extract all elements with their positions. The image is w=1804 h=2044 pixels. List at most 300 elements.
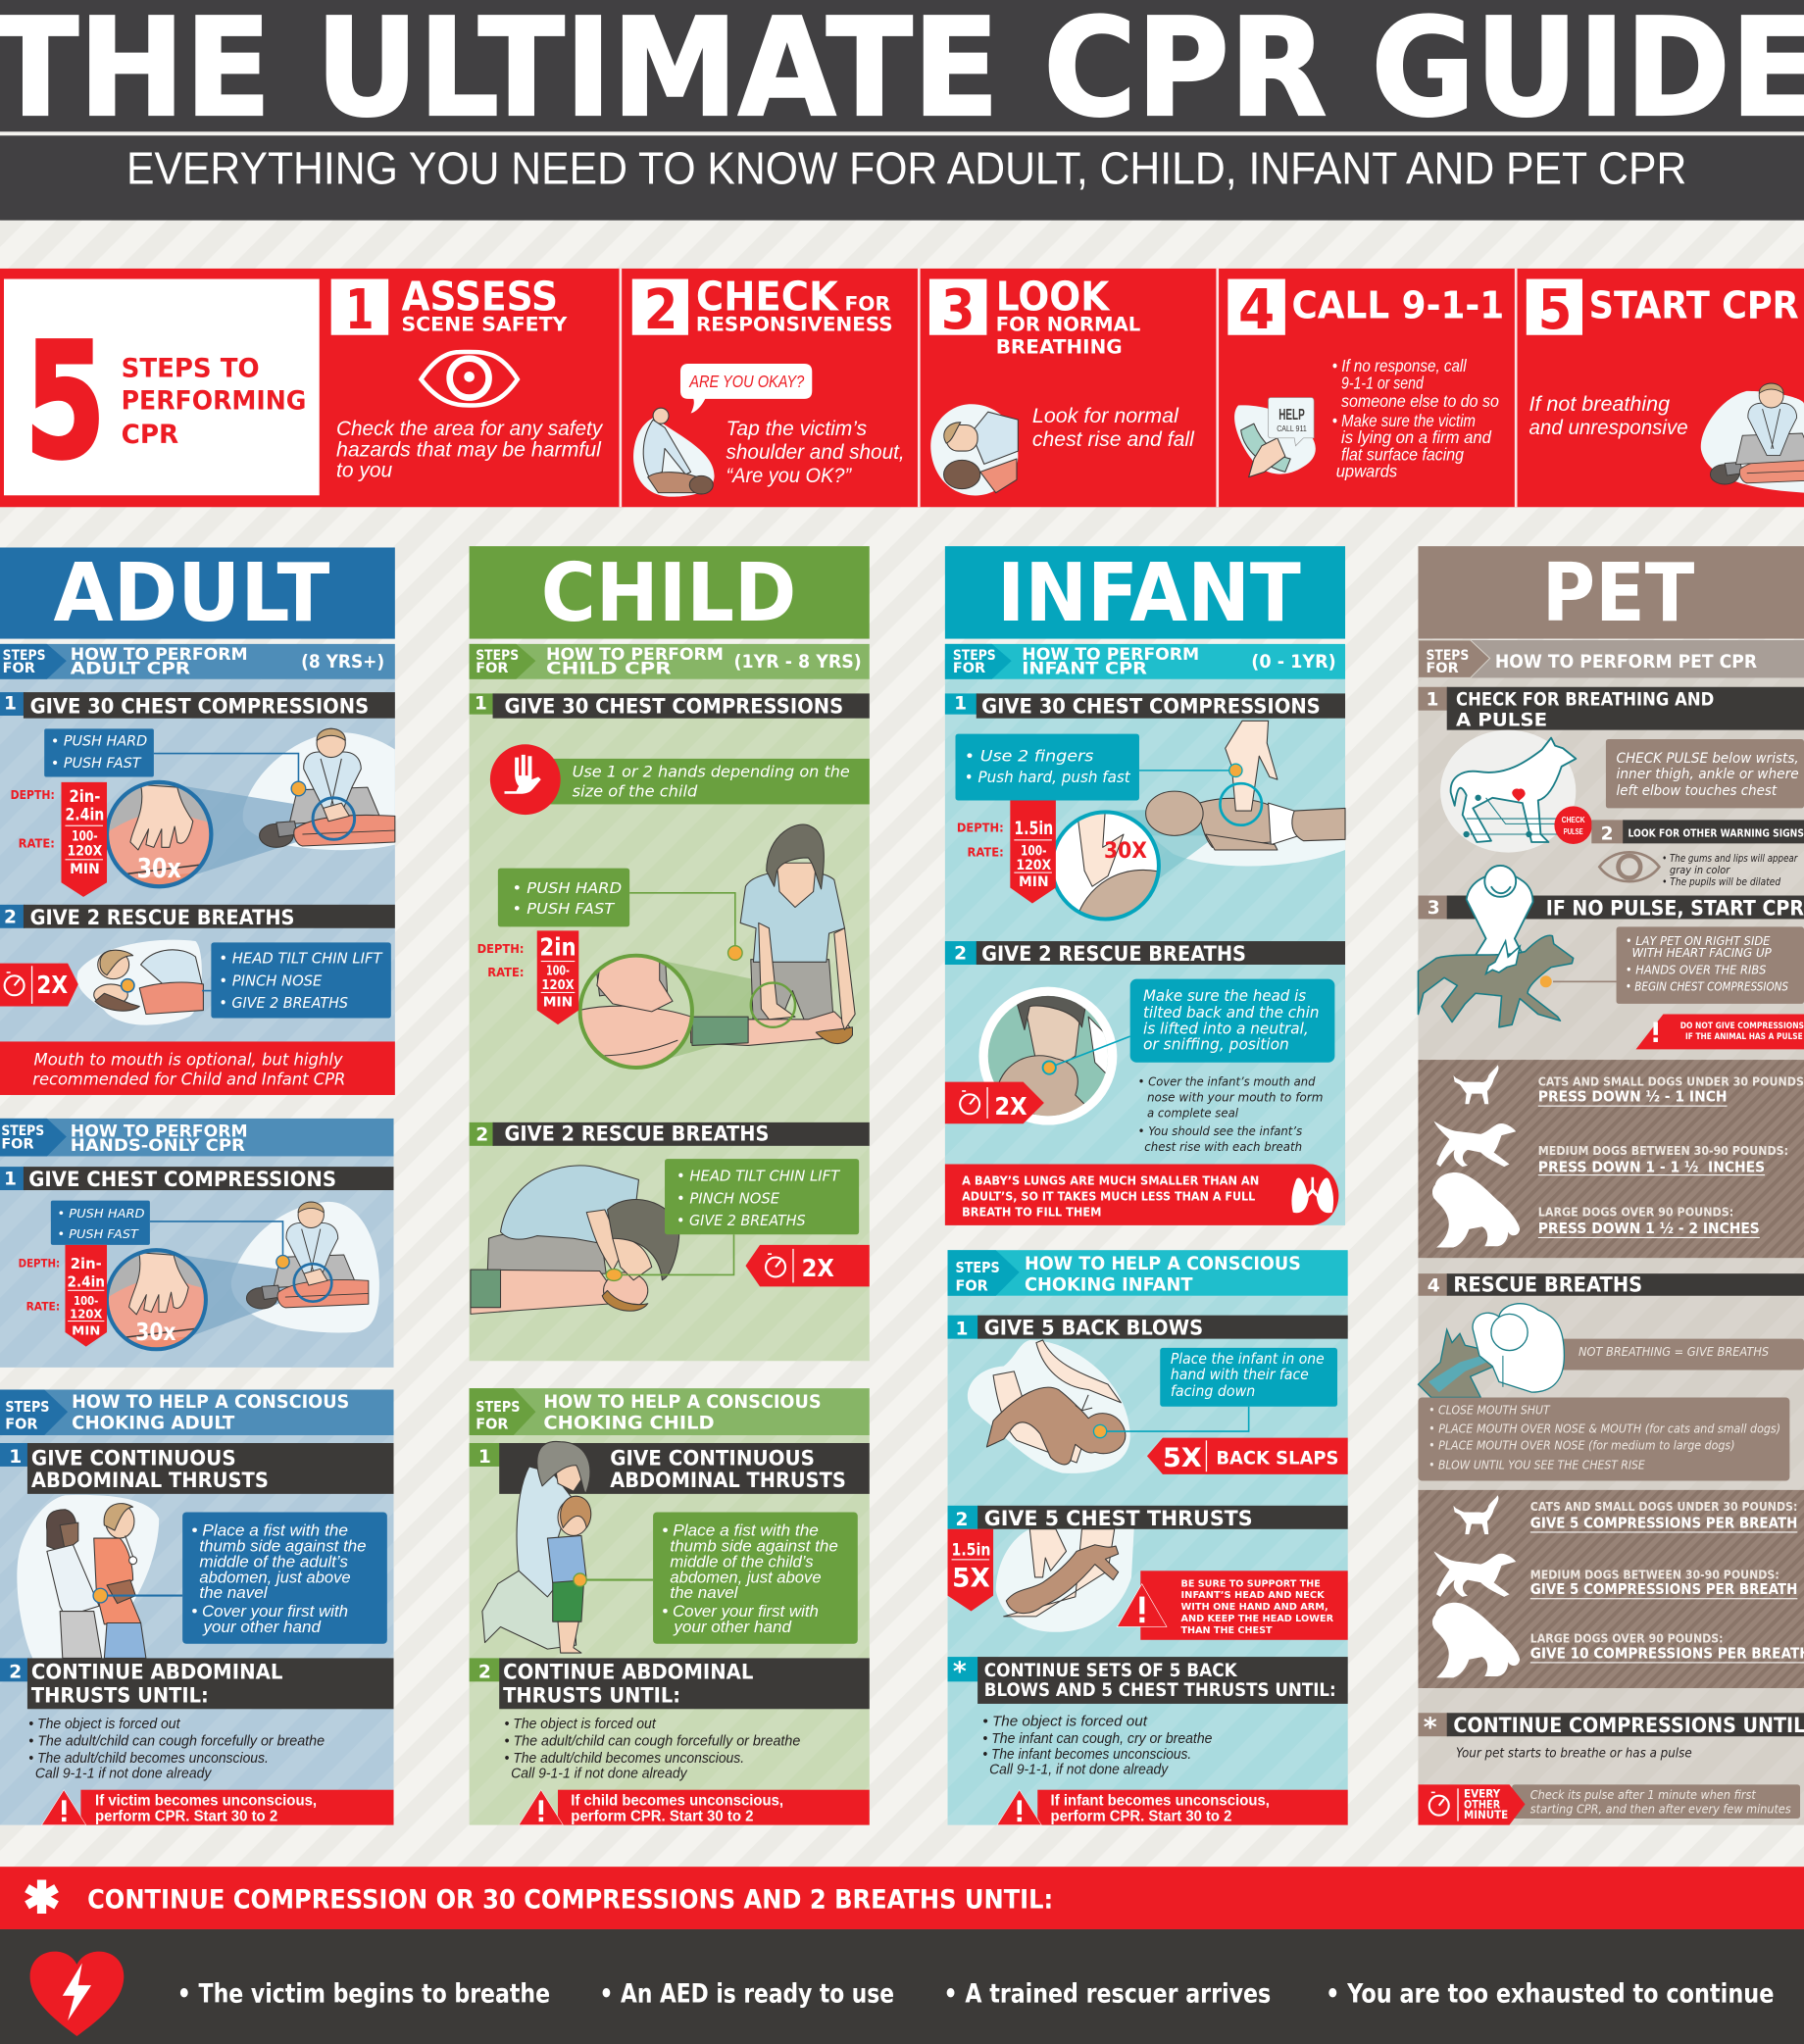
panel: choking child: HOW TO HELP A CONSCIOUS	[543, 1392, 822, 1413]
depth and rate tag	[11, 782, 107, 897]
step 4: call 9-1-1: 9-1-1 or send	[1341, 373, 1425, 392]
callout: place a fist: your other hand	[202, 1618, 322, 1636]
callout: use 1 or 2 hands: size of the child	[573, 781, 698, 800]
depth and rate tag: MIN	[1019, 874, 1049, 890]
bar: not breathing: NOT BREATHING = GIVE BREATHS	[1578, 1344, 1769, 1359]
list: until conditions: • The object is forced out	[28, 1717, 180, 1732]
list: infant breath notes: a complete seal	[1147, 1106, 1238, 1121]
step heading: if no pulse start CPR	[1418, 896, 1804, 921]
depth and rate tag: 120X	[70, 1306, 103, 1321]
step heading: continue thrusts	[0, 1658, 394, 1709]
warning bar	[42, 1790, 394, 1825]
step heading: give 2 rescue breaths: 2	[4, 907, 17, 927]
warning: support head: AND KEEP THE HEAD LOWER	[1181, 1614, 1333, 1624]
list: infant breath notes	[1138, 1074, 1323, 1154]
panel: hands-only CPR	[0, 1119, 394, 1368]
callout: place a fist: thumb side against the	[199, 1536, 367, 1555]
list: until conditions	[505, 1717, 800, 1782]
callout: head tilt chin lift	[606, 1159, 859, 1280]
warning bar: perform CPR. Start 30 to 2	[1051, 1809, 1231, 1825]
heading: infant: INFANT	[997, 546, 1301, 640]
depth and rate tag: MIN	[543, 996, 573, 1011]
column: pet	[1418, 546, 1804, 1825]
tag: 5x back slaps	[1147, 1438, 1348, 1474]
callout: head tilt chin lift: • HEAD TILT CHIN LIFT	[676, 1169, 840, 1185]
callout: place a fist: the navel	[670, 1583, 739, 1602]
step 5: start CPR: and unresponsive	[1528, 416, 1688, 439]
callout: check pulse: left elbow touches chest	[1617, 783, 1778, 799]
illustration: child rescue breaths	[471, 1166, 679, 1314]
list: rescue breath instructions	[1418, 1397, 1789, 1481]
step heading: abdominal thrusts: GIVE CONTINUOUS	[31, 1447, 236, 1471]
callout: lay pet on right side: • LAY PET ON RIGHT SIDE	[1626, 934, 1771, 948]
icon: eye	[1599, 852, 1659, 881]
step 5: start CPR: 5	[1538, 278, 1572, 342]
callout: place a fist: middle of the child’s	[670, 1552, 814, 1570]
callout: use 2 fingers: • Use 2 fingers	[965, 747, 1093, 766]
callout: place a fist	[182, 1512, 387, 1644]
band: how to perform infant CPR: (0 - 1YR)	[1251, 652, 1336, 673]
step heading: if no pulse start CPR: 3	[1428, 898, 1440, 919]
panel: choking adult: CHOKING ADULT	[72, 1413, 235, 1433]
callout: use 1 or 2 hands	[490, 744, 870, 815]
callout: head tilt chin lift: • GIVE 2 BREATHS	[676, 1213, 806, 1229]
panel: choking infant	[948, 1250, 1348, 1825]
illustration: tapping shoulder	[633, 408, 715, 497]
badge: check pulse: CHECK	[1562, 816, 1585, 824]
panel: choking child: STEPS	[476, 1399, 520, 1416]
step 4: call 9-1-1: 4	[1238, 278, 1275, 342]
illustration: start compressions	[1701, 383, 1804, 493]
callout: place a fist: thumb side against the	[670, 1536, 838, 1555]
speech bubble	[680, 364, 812, 414]
banner: continue compression: CONTINUE COMPRESSION OR 30 COMPRESSIONS AND 2 BREATHS UNTIL:	[87, 1885, 1053, 1916]
badge: check pulse: PULSE	[1564, 827, 1583, 836]
step 5: start CPR: If not breathing	[1528, 392, 1670, 416]
column: infant	[945, 546, 1348, 1825]
depth and rate tag: DEPTH:	[477, 942, 524, 956]
step heading: continue compressions until: *	[1424, 1713, 1437, 1743]
panel: press depth by size: MEDIUM DOGS BETWEEN 30-90 POUNDS:	[1538, 1144, 1788, 1158]
callout: check pulse: inner thigh, ankle or where	[1617, 767, 1799, 782]
icon: hand	[490, 744, 561, 815]
list: infant breath notes: • You should see the infant’s	[1138, 1123, 1303, 1138]
band: how to perform child CPR: FOR	[476, 661, 509, 676]
list: until conditions: • The object is forced out	[505, 1717, 657, 1732]
callout: place a fist: • Place a fist with the	[662, 1521, 819, 1539]
step heading: check for breathing: A PULSE	[1456, 711, 1547, 731]
warning: support head	[1117, 1570, 1348, 1640]
panel: five steps band	[0, 269, 1804, 507]
panel: press depth by size: PRESS DOWN 1 ½ - 2 INCHES	[1538, 1220, 1760, 1237]
step heading: continue sets: CONTINUE SETS OF 5 BACK	[984, 1661, 1237, 1681]
illustration: dog pulse check	[1440, 730, 1576, 853]
step heading: give 30 chest compressions: GIVE 30 CHEST COMPRESSIONS	[505, 694, 843, 719]
depth and rate tag: 100-	[546, 965, 570, 979]
warning bar: If victim becomes unconscious,	[95, 1793, 317, 1810]
illustration: adult compressions: 30x	[137, 852, 181, 884]
step heading: continue sets: *	[953, 1657, 967, 1687]
bar: check pulse interval: Check its pulse after 1 minute when first	[1530, 1787, 1757, 1802]
band: how to perform infant CPR: STEPS	[953, 648, 996, 664]
callout: head tilted back	[1056, 979, 1334, 1065]
panel: choking child	[470, 1388, 870, 1825]
step heading: abdominal thrusts: GIVE CONTINUOUS	[610, 1447, 815, 1471]
callout: place the infant: hand with their face	[1171, 1367, 1309, 1383]
warning bar: If child becomes unconscious,	[571, 1793, 783, 1810]
panel: choking infant: CHOKING INFANT	[1025, 1274, 1193, 1295]
step heading: continue thrusts: CONTINUE ABDOMINAL	[503, 1661, 753, 1685]
panel: stop conditions: • A trained rescuer arrives	[944, 1978, 1271, 2009]
list: until conditions: • The adult/child can cough forcefully or breathe	[28, 1733, 325, 1749]
callout: lay pet on right side: • HANDS OVER THE RIBS	[1626, 963, 1767, 976]
subtitle: EVERYTHING YOU NEED TO KNOW FOR ADULT, CHILD, INFANT AND PET CPR	[126, 142, 1686, 193]
panel: press depth by size: LARGE DOGS OVER 90 POUNDS:	[1538, 1206, 1733, 1220]
callout: place a fist: abdomen, just above	[670, 1568, 822, 1586]
step heading: give 30 chest compressions: 1	[954, 693, 967, 714]
callout: place a fist	[653, 1512, 858, 1644]
illustration: adult choking	[17, 1495, 182, 1658]
step 4: call 9-1-1: someone else to do so	[1341, 391, 1499, 411]
warning: support head: WITH ONE HAND AND ARM,	[1181, 1602, 1328, 1613]
panel: choking adult: STEPS	[5, 1399, 50, 1416]
callout: use 2 fingers: • Push hard, push fast	[965, 768, 1130, 786]
callout: lay pet on right side	[1539, 926, 1804, 1004]
icon: asterisk	[27, 1879, 57, 1914]
band: how to perform adult CPR: (8 YRS+)	[301, 652, 384, 673]
banner: continue compression	[0, 1867, 1804, 1929]
panel: stop conditions: • The victim begins to breathe	[177, 1978, 550, 2009]
band: how to perform child CPR: CHILD CPR	[546, 659, 672, 678]
list: infant breath notes: chest rise with each breath	[1144, 1139, 1302, 1154]
icon: large dog	[1432, 1603, 1520, 1677]
list: until conditions: • The infant can cough, cry or breathe	[982, 1731, 1212, 1747]
step heading: chest thrusts	[948, 1506, 1348, 1531]
warning: do not give compressions	[1635, 1015, 1804, 1049]
callout: place a fist: • Cover your first with	[662, 1602, 819, 1620]
depth and rate tag: 2in-	[69, 787, 100, 806]
panel: hands-only CPR: STEPS	[1, 1123, 44, 1139]
step heading: warning signs	[1591, 820, 1804, 844]
step 4: call 9-1-1: • If no response, call	[1332, 356, 1468, 375]
heading: pet: PET	[1542, 546, 1694, 640]
tag: 2x: 2X	[36, 971, 68, 999]
callout: baby lungs: BREATH TO FILL THEM	[962, 1205, 1101, 1220]
warning bar: If infant becomes unconscious,	[1051, 1793, 1270, 1810]
depth and rate tag	[477, 930, 578, 1024]
heading: child: CHILD	[541, 546, 796, 640]
step 1: assess scene safety	[331, 273, 604, 482]
step heading: give 2 rescue breaths: 2	[954, 944, 967, 965]
depth and rate tag	[957, 800, 1056, 903]
step heading: give 2 rescue breaths: GIVE 2 RESCUE BREATHS	[505, 1122, 769, 1147]
panel: 5 steps to performing CPR: CPR	[122, 420, 178, 450]
callout: use 2 fingers	[956, 734, 1242, 800]
step 3: look for normal breathing: chest rise and fall	[1032, 427, 1195, 451]
icon: medium dog	[1433, 1122, 1516, 1167]
band: how to perform child CPR: HOW TO PERFORM	[546, 645, 724, 665]
bar: not breathing	[1562, 1339, 1804, 1371]
callout: push hard push fast: • PUSH FAST	[51, 756, 142, 772]
depth and rate tag: DEPTH:	[19, 1257, 60, 1270]
panel: choking child: CHOKING CHILD	[543, 1413, 715, 1433]
band: how to perform adult CPR: HOW TO PERFORM	[71, 645, 248, 665]
callout: head tilt chin lift	[211, 942, 391, 1019]
callout: push hard push fast	[44, 728, 306, 796]
list: warning signs	[1662, 852, 1798, 888]
callout: place a fist: middle of the adult’s	[199, 1552, 348, 1570]
panel: press depth by size: PRESS DOWN ½ - 1 INCH	[1538, 1088, 1728, 1106]
illustration: adult compressions	[104, 728, 395, 892]
callout: head tilted back: tilted back and the chin	[1143, 1003, 1319, 1022]
panel: hands-only CPR: FOR	[1, 1136, 34, 1152]
callout: place the infant	[1093, 1348, 1337, 1438]
band: how to perform infant CPR: INFANT CPR	[1022, 659, 1147, 678]
band: how to perform adult CPR: ADULT CPR	[71, 659, 190, 678]
panel: choking adult: FOR	[5, 1416, 38, 1432]
step heading: give 2 rescue breaths: GIVE 2 RESCUE BREATHS	[981, 942, 1246, 967]
callout: place a fist: the navel	[199, 1583, 269, 1602]
band: how to perform pet CPR	[1418, 640, 1804, 677]
text: pet starts to breathe: Your pet starts to breathe or has a pulse	[1456, 1746, 1692, 1761]
tag: 5x back slaps: BACK SLAPS	[1216, 1448, 1338, 1469]
icon: phone and help sign	[1234, 398, 1316, 477]
depth and rate tag: 100-	[1021, 843, 1047, 859]
step 1: assess scene safety: 1	[345, 278, 375, 342]
icon: large dog	[1432, 1172, 1520, 1248]
icon: phone and help sign: CALL 911	[1277, 424, 1307, 433]
step heading: back blows: 1	[956, 1320, 968, 1340]
band: how to perform child CPR	[470, 644, 870, 679]
illustration: chest thrusts	[996, 1529, 1134, 1632]
step 3: look for normal breathing: LOOK	[996, 273, 1111, 320]
list: until conditions: Call 9-1-1 if not done already	[511, 1767, 688, 1782]
step 4: call 9-1-1	[1228, 278, 1504, 481]
step 3: look for normal breathing	[929, 273, 1195, 496]
depth and rate tag: 1.5in	[1014, 819, 1053, 839]
callout: mouth to mouth note: recommended for Child and Infant CPR	[32, 1070, 345, 1088]
illustration: infant rescue breaths	[978, 983, 1117, 1125]
step 1: assess scene safety: Check the area for any safety	[336, 417, 604, 440]
depth and rate tag: RATE:	[487, 966, 524, 979]
tag: every other minute	[1418, 1784, 1525, 1825]
callout: lay pet on right side: WITH HEART FACING UP	[1632, 946, 1773, 960]
band: how to perform adult CPR	[0, 644, 395, 679]
warning: support head: BE SURE TO SUPPORT THE	[1181, 1578, 1321, 1589]
callout: push hard push fast	[498, 869, 742, 960]
tag: every other minute: EVERY	[1464, 1788, 1501, 1801]
panel: press depth by size: PRESS DOWN 1 - 1 ½ INCHES	[1538, 1158, 1765, 1175]
step heading: rescue breaths: RESCUE BREATHS	[1453, 1273, 1642, 1298]
list: until conditions: • The adult/child becomes unconscious.	[505, 1751, 744, 1767]
step heading: chest thrusts: GIVE 5 CHEST THRUSTS	[984, 1507, 1253, 1531]
step heading: give 30 chest compressions: GIVE 30 CHEST COMPRESSIONS	[981, 694, 1321, 719]
callout: head tilted back: or sniffing, position	[1143, 1034, 1289, 1053]
depth and rate tag: DEPTH:	[957, 821, 1004, 834]
list: infant breath notes: • Cover the infant’s mouth and	[1138, 1074, 1316, 1089]
list: until conditions: • The infant becomes unconscious.	[982, 1747, 1191, 1763]
callout: push hard push fast: • PUSH HARD	[57, 1206, 145, 1221]
panel: choking infant: STEPS	[956, 1260, 1000, 1276]
step heading: abdominal thrusts	[0, 1443, 394, 1494]
tag: every other minute: MINUTE	[1464, 1809, 1508, 1821]
panel: stop conditions: • An AED is ready to use	[600, 1978, 894, 2009]
tag: 5x back slaps: 5X	[1163, 1443, 1202, 1473]
step heading: continue thrusts	[470, 1658, 870, 1709]
step 3: look for normal breathing: Look for normal	[1032, 404, 1179, 427]
panel: choking adult: HOW TO HELP A CONSCIOUS	[72, 1392, 349, 1413]
list: rescue breath instructions: • CLOSE MOUTH SHUT	[1428, 1404, 1551, 1418]
step 2: check for responsiveness: CHECK	[696, 273, 840, 320]
step heading: abdominal thrusts	[470, 1443, 870, 1494]
panel: compressions per breath: MEDIUM DOGS BETWEEN 30-90 POUNDS:	[1530, 1568, 1779, 1581]
depth and rate tag: 2.4in	[65, 805, 104, 823]
callout: baby lungs: ADULT’S, SO IT TAKES MUCH LESS THAN A FULL	[962, 1189, 1255, 1204]
depth and rate tag: 120X	[1016, 858, 1051, 873]
depth and rate tag: 120X	[67, 843, 103, 859]
icon: cat	[1453, 1495, 1498, 1534]
panel: choking adult	[0, 1389, 394, 1825]
callout: push hard push fast: • PUSH FAST	[57, 1226, 139, 1241]
callout: push hard push fast: • PUSH FAST	[512, 901, 615, 918]
illustration: pet rescue breaths	[1418, 1304, 1564, 1397]
step heading: continue thrusts: THRUSTS UNTIL:	[31, 1684, 209, 1709]
step 1: assess scene safety: SCENE SAFETY	[401, 313, 568, 336]
tag: 1.5in 5x: 1.5in	[952, 1540, 990, 1559]
list: until conditions: • The object is forced out	[982, 1715, 1148, 1730]
list: until conditions	[982, 1715, 1212, 1778]
step heading: warning signs: 2	[1601, 823, 1614, 844]
depth and rate tag: 2in	[539, 933, 576, 962]
step heading: abdominal thrusts: 1	[9, 1447, 22, 1468]
panel: 5 steps to performing CPR: 5	[25, 309, 106, 494]
icon: medium dog	[1433, 1551, 1516, 1597]
illustration: child choking	[482, 1441, 653, 1653]
step heading: continue thrusts: 2	[9, 1662, 22, 1682]
icon: AED heart	[30, 1952, 124, 2036]
warning: support head: THAN THE CHEST	[1181, 1625, 1273, 1636]
callout: place a fist: • Cover your first with	[191, 1602, 348, 1620]
depth and rate tag: DEPTH:	[11, 788, 55, 802]
depth and rate tag	[19, 1245, 107, 1347]
list: rescue breath instructions: • PLACE MOUTH OVER NOSE (for medium to large dogs)	[1428, 1439, 1735, 1453]
panel: compressions per breath: LARGE DOGS OVER 90 POUNDS:	[1530, 1631, 1724, 1645]
step heading: continue thrusts: 2	[478, 1662, 491, 1682]
depth and rate tag: 120X	[541, 978, 575, 993]
step heading: rescue breaths	[1418, 1273, 1804, 1298]
band: how to perform infant CPR: HOW TO PERFORM	[1022, 645, 1199, 665]
step heading: give 30 chest compressions: 1	[4, 693, 17, 714]
step 3: look for normal breathing: BREATHING	[996, 334, 1123, 358]
depth and rate tag: RATE:	[26, 1300, 60, 1313]
depth and rate tag: RATE:	[19, 836, 55, 850]
step 2: check for responsiveness: Tap the victim’s	[727, 417, 867, 440]
panel: 5 steps to performing CPR	[4, 279, 320, 495]
title banner	[0, 0, 1804, 221]
step heading: check for breathing: 1	[1426, 689, 1438, 710]
panel: compressions per breath	[1418, 1490, 1804, 1688]
panel: choking child: FOR	[476, 1416, 508, 1432]
step 2: check for responsiveness: 2	[644, 278, 677, 342]
callout: push hard push fast: • PUSH HARD	[512, 880, 622, 897]
column: child	[470, 546, 870, 1825]
step 2: check for responsiveness: RESPONSIVENESS	[696, 313, 893, 336]
callout: place the infant: facing down	[1171, 1383, 1255, 1400]
tag: 1.5in 5x	[948, 1529, 993, 1612]
step heading: check for breathing	[1418, 687, 1804, 731]
band: how to perform infant CPR	[945, 644, 1345, 679]
step heading: continue sets: BLOWS AND 5 CHEST THRUSTS UNTIL:	[984, 1680, 1336, 1701]
warning: support head: INFANT’S HEAD AND NECK	[1181, 1590, 1326, 1601]
panel: 5 steps to performing CPR: PERFORMING	[122, 386, 306, 417]
panel: hands-only CPR: HANDS-ONLY CPR	[71, 1136, 245, 1156]
callout: place a fist: abdomen, just above	[199, 1568, 351, 1586]
depth and rate tag: 100-	[74, 1293, 98, 1308]
speech bubble: ARE YOU OKAY?	[688, 372, 805, 391]
step heading: give 2 rescue breaths: 2	[476, 1125, 488, 1146]
step heading: continue thrusts: THRUSTS UNTIL:	[503, 1684, 680, 1709]
step 1: assess scene safety: hazards that may be harmful	[336, 437, 602, 461]
step heading: rescue breaths: 4	[1428, 1276, 1440, 1297]
band: how to perform adult CPR: FOR	[3, 661, 35, 676]
callout: head tilted back: Make sure the head is	[1143, 986, 1306, 1005]
step heading: check for breathing: CHECK FOR BREATHING AND	[1456, 689, 1714, 710]
callout: use 1 or 2 hands: Use 1 or 2 hands depending on the	[573, 763, 850, 781]
callout: head tilt chin lift: • GIVE 2 BREATHS	[219, 995, 348, 1012]
depth and rate tag: 100-	[72, 829, 98, 845]
tag: 2x	[745, 1245, 870, 1286]
list: infant breath notes: nose with your mouth to form	[1147, 1090, 1323, 1105]
list: until conditions: • The adult/child can cough forcefully or breathe	[505, 1733, 800, 1749]
warning bar: perform CPR. Start 30 to 2	[571, 1809, 753, 1825]
icon: cat	[1453, 1065, 1498, 1104]
step 4: call 9-1-1: is lying on a firm and	[1341, 427, 1492, 447]
list: rescue breath instructions: • BLOW UNTIL YOU SEE THE CHEST RISE	[1428, 1459, 1645, 1472]
band: how to perform child CPR: STEPS	[476, 648, 519, 664]
band: how to perform pet CPR: FOR	[1426, 661, 1459, 676]
list: rescue breath instructions: • PLACE MOUTH OVER NOSE & MOUTH (for cats and small dogs)	[1428, 1421, 1780, 1435]
step heading: back blows: GIVE 5 BACK BLOWS	[984, 1317, 1203, 1341]
panel: hands-only CPR: HOW TO PERFORM	[71, 1122, 248, 1142]
callout: place a fist: • Place a fist with the	[191, 1521, 348, 1539]
step heading: back blows	[948, 1316, 1348, 1341]
list: until conditions: Call 9-1-1, if not done already	[989, 1763, 1170, 1778]
panel: press depth by size	[1418, 1060, 1804, 1258]
callout: head tilt chin lift: • HEAD TILT CHIN LIFT	[219, 951, 383, 968]
warning bar	[519, 1790, 870, 1825]
list: until conditions: • The adult/child becomes unconscious.	[28, 1751, 269, 1767]
callout: check pulse: CHECK PULSE below wrists,	[1617, 751, 1799, 767]
band: how to perform child CPR: (1YR - 8 YRS)	[733, 652, 862, 673]
column: adult	[0, 546, 395, 1825]
depth and rate tag: MIN	[70, 862, 100, 877]
callout: push hard push fast	[51, 1201, 289, 1269]
step heading: chest thrusts: 2	[956, 1510, 968, 1530]
step heading: give 30 chest compressions: GIVE 30 CHEST COMPRESSIONS	[30, 694, 369, 719]
icon: eye	[421, 352, 518, 406]
list: until conditions: Call 9-1-1 if not done already	[35, 1767, 213, 1782]
step heading: give 30 chest compressions: 1	[475, 693, 487, 714]
warning bar	[997, 1790, 1348, 1825]
depth and rate tag: MIN	[72, 1323, 100, 1338]
tag: 1.5in 5x: 5X	[952, 1563, 990, 1593]
step 5: start CPR	[1527, 278, 1804, 493]
tag: 2x: 2X	[994, 1092, 1027, 1121]
callout: mouth to mouth note	[0, 1041, 395, 1095]
step heading: abdominal thrusts: ABDOMINAL THRUSTS	[610, 1469, 846, 1493]
bar: check pulse interval	[1512, 1784, 1800, 1819]
callout: push hard push fast: • PUSH HARD	[51, 734, 147, 750]
